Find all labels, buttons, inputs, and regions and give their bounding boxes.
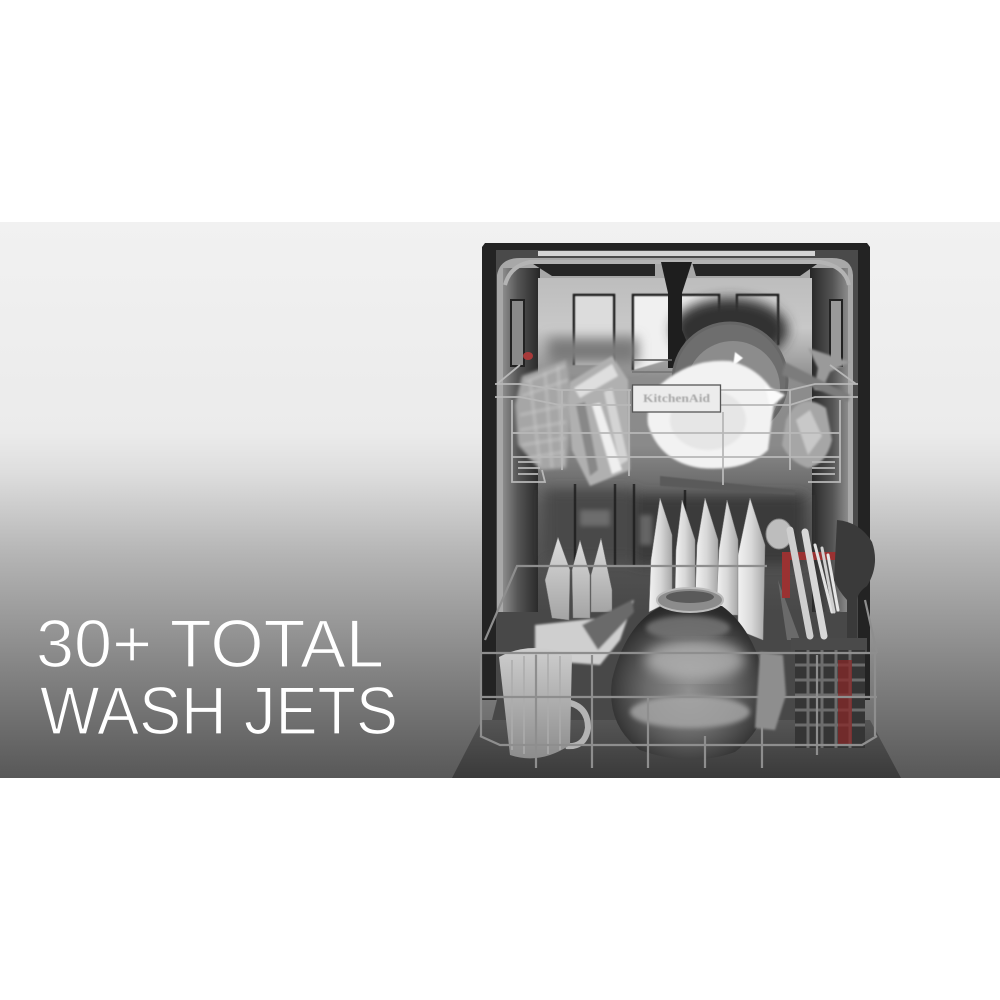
red tine holder: [782, 552, 838, 598]
cutlery basket: [778, 580, 867, 748]
large mixing bowl: [611, 588, 766, 760]
wine glass and tumbler: [782, 348, 850, 468]
large plates: [649, 498, 765, 640]
headline: [36, 606, 398, 749]
spatula: [834, 520, 875, 638]
upper rack wires: [495, 360, 858, 485]
baking dish: [535, 600, 634, 665]
side plate behind bowl: [755, 652, 786, 730]
back wall panels: [574, 295, 778, 370]
lower rack contents: [499, 498, 875, 760]
headline: 30+ TOTAL: [36, 606, 384, 682]
rack shelf: [660, 476, 795, 495]
background gradient band: [0, 222, 1000, 778]
lower rack wires: [480, 566, 877, 768]
striped mug: [499, 648, 588, 758]
dishwasher: [452, 243, 901, 778]
lower rack dark interior: [482, 612, 870, 760]
door frame: [482, 243, 870, 700]
headline: WASH JETS: [40, 673, 398, 749]
wall reflections: [545, 298, 805, 565]
small plates: [545, 537, 612, 620]
frame inner: [496, 250, 858, 700]
utensils: [790, 530, 838, 636]
KitchenAid handle: KitchenAid: [643, 393, 711, 405]
upper rack contents: [515, 323, 850, 495]
dark central tower: [661, 262, 692, 368]
glass container left: [515, 360, 572, 470]
tub interior: [497, 258, 853, 700]
white plates: [648, 361, 785, 469]
lower wall strips: [575, 484, 685, 566]
serving spoon: [766, 519, 792, 549]
KitchenAid handle: [632, 385, 720, 412]
serving utensil: [782, 362, 850, 402]
glass bowl: [673, 323, 787, 437]
glass container right: [568, 356, 630, 486]
lower rack floor: [452, 720, 901, 778]
